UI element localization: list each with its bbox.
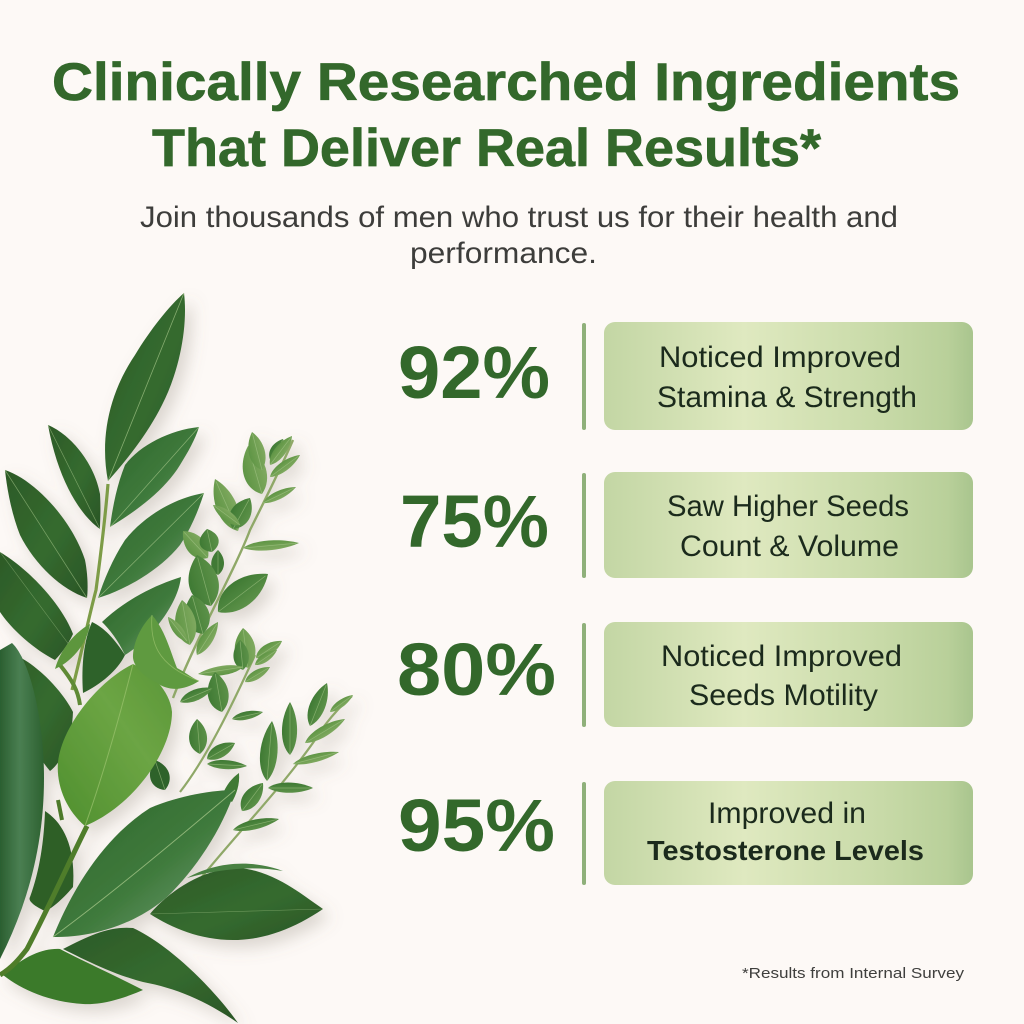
small twig 2 — [145, 627, 285, 802]
upper leaves — [5, 293, 204, 669]
label card — [604, 622, 973, 727]
central light leaf — [58, 615, 199, 826]
subtitle — [140, 201, 898, 270]
title: Clinically Researched Ingredients — [52, 53, 960, 112]
label card — [604, 472, 973, 578]
title: That Deliver Real Results* — [152, 119, 821, 178]
label card: Seeds Motility — [689, 679, 878, 712]
foreground large left leaf — [0, 643, 44, 959]
label card: Count & Volume — [680, 530, 899, 563]
subtitle: performance. — [410, 237, 597, 270]
label card: Stamina & Strength — [657, 381, 917, 414]
label card: Testosterone Levels — [647, 835, 924, 866]
label card: Saw Higher Seeds — [667, 490, 909, 523]
title — [52, 53, 960, 178]
divider — [582, 623, 586, 727]
upper stem — [72, 484, 108, 690]
stat value: 92% — [398, 331, 550, 414]
illustration: leafy branches — [0, 293, 355, 1023]
footnote: *Results from Internal Survey — [742, 965, 965, 982]
label card — [604, 322, 973, 430]
label card: Noticed Improved — [661, 640, 902, 673]
stat value: 75% — [400, 480, 549, 563]
subtitle: Join thousands of men who trust us for their health and — [140, 201, 898, 234]
stat row: 80% — [397, 622, 973, 727]
back dark leaves — [0, 552, 181, 911]
label card — [604, 781, 973, 885]
stat row: 75% — [400, 472, 973, 578]
label card: Improved in — [708, 797, 866, 830]
large lower leaf — [53, 790, 235, 937]
label card: Noticed Improved — [659, 341, 901, 374]
stat value: 95% — [398, 784, 555, 867]
divider — [582, 323, 586, 430]
small twig 1 — [164, 430, 303, 698]
small twig 3 — [197, 680, 355, 883]
central lower leaves — [0, 826, 323, 1023]
stat row: 92% — [398, 322, 973, 430]
stat value: 80% — [397, 628, 556, 711]
stat row: 95% — [398, 781, 973, 885]
divider — [582, 473, 586, 578]
divider — [582, 782, 586, 885]
